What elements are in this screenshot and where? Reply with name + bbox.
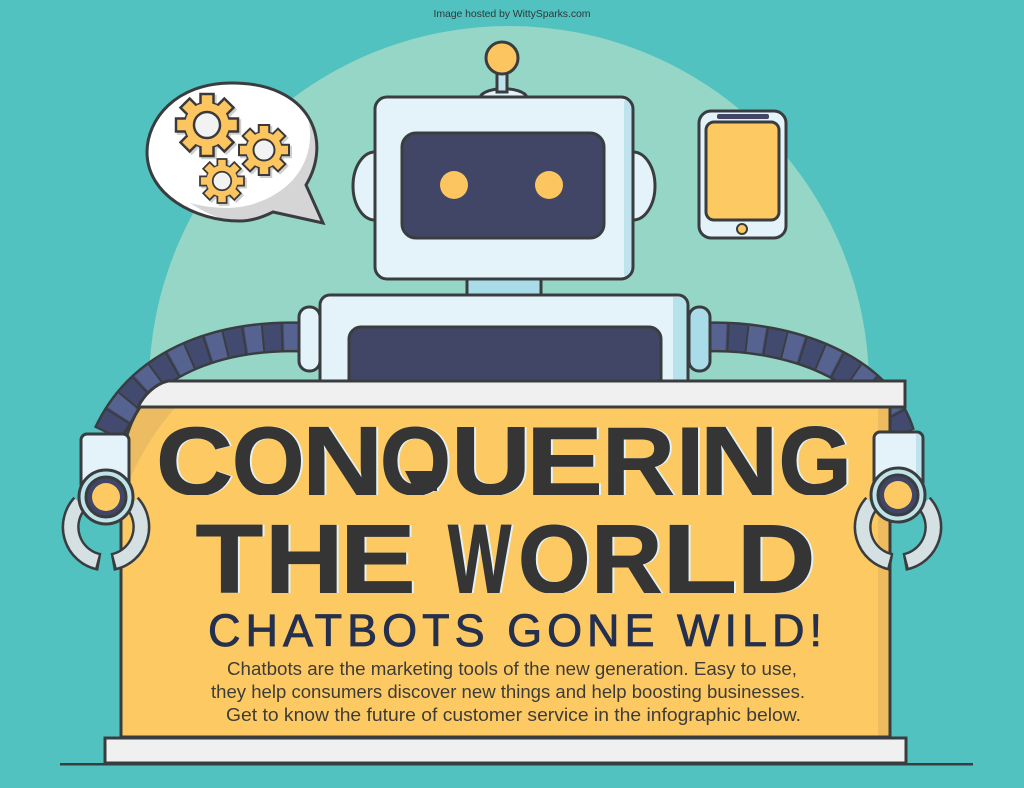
left joint xyxy=(79,470,133,524)
right shoulder xyxy=(689,307,710,371)
robot right eye xyxy=(535,171,563,199)
subtitle: CHATBOTS GONE WILD! xyxy=(208,605,822,656)
title: R xyxy=(591,504,662,613)
title: U xyxy=(451,408,531,516)
robot left eye xyxy=(440,171,468,199)
right arm xyxy=(708,337,900,434)
right hand xyxy=(863,432,933,562)
icon: tablet xyxy=(699,111,786,238)
left shoulder xyxy=(299,307,320,371)
robot neck xyxy=(467,279,541,295)
description text: they help consumers discover new things and help boosting businesses. xyxy=(211,682,805,702)
ground line xyxy=(60,763,973,766)
right wrist xyxy=(874,432,923,488)
left arm xyxy=(108,337,302,434)
title: N xyxy=(700,407,778,515)
robot face screen xyxy=(402,133,604,238)
title: N xyxy=(302,408,383,516)
chest screen xyxy=(349,327,661,392)
description text: Get to know the future of customer service in the infographic below. xyxy=(226,705,801,725)
title: O xyxy=(232,408,304,516)
icon: medium gear xyxy=(239,125,289,175)
title: W xyxy=(448,505,511,613)
yellow title board xyxy=(121,407,890,737)
robot head xyxy=(375,97,633,279)
title: O xyxy=(518,506,590,614)
title: L xyxy=(662,506,737,613)
icon: large gear xyxy=(176,94,238,156)
right claw xyxy=(863,503,933,562)
title: E xyxy=(526,406,603,515)
left claw xyxy=(71,503,141,562)
title: D xyxy=(737,505,815,613)
robot antenna xyxy=(480,42,527,97)
title: R xyxy=(602,406,675,515)
title: T xyxy=(196,506,263,614)
description text: Chatbots are the marketing tools of the new generation. Easy to use, xyxy=(227,659,797,679)
title: C xyxy=(156,407,233,515)
hosting credit: Image hosted by WittySparks.com xyxy=(434,8,591,20)
description text xyxy=(211,659,805,725)
left wrist xyxy=(81,434,129,490)
bottom plank xyxy=(105,738,906,763)
title xyxy=(160,426,848,593)
title: H xyxy=(265,505,343,613)
robot body xyxy=(320,295,688,392)
robot ears xyxy=(353,152,655,220)
title: E xyxy=(340,505,416,614)
left hand xyxy=(71,434,141,562)
title: I xyxy=(676,408,704,516)
icon: small gear xyxy=(200,159,244,203)
background arch xyxy=(149,26,869,746)
right joint xyxy=(871,468,925,522)
icon: speech bubble with gears xyxy=(147,83,323,223)
top plank xyxy=(138,381,905,407)
title: G xyxy=(778,408,852,516)
title: Q xyxy=(380,407,451,515)
